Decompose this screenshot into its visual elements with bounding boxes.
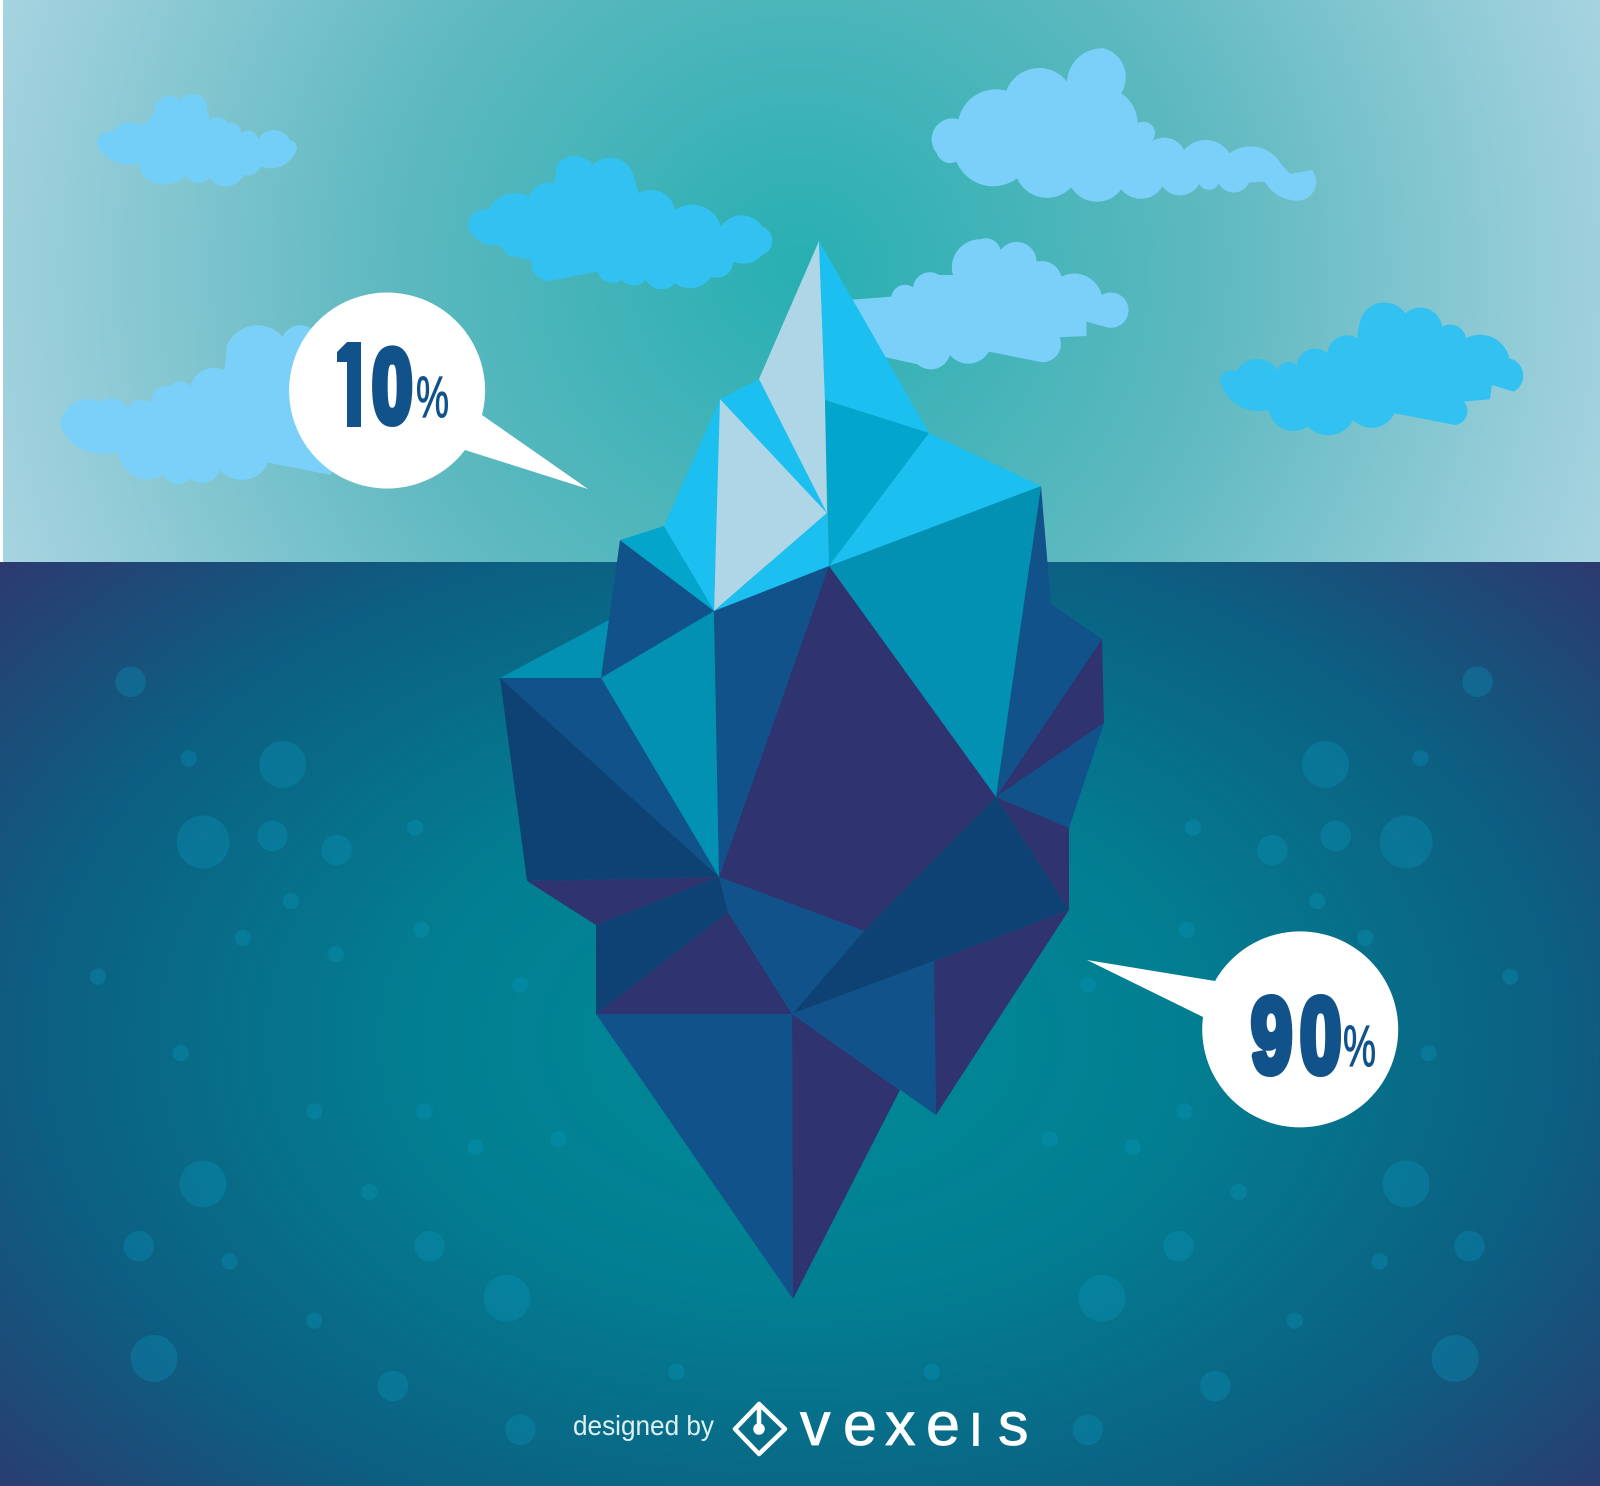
cloud: large top right bbox=[932, 48, 1316, 202]
wordmark: e bbox=[843, 1390, 877, 1458]
percent sign: % bbox=[1343, 1015, 1376, 1079]
callout bubble and tail bbox=[1087, 931, 1398, 1127]
cloud: bright right bbox=[1220, 302, 1523, 435]
percent sign: % bbox=[416, 366, 449, 430]
water background bbox=[0, 562, 1600, 1486]
value: 90: 9 bbox=[1251, 977, 1292, 1095]
value: 90 bbox=[1251, 977, 1341, 1095]
value: 10: 0 bbox=[372, 329, 412, 445]
callout: 10% bbox=[289, 293, 588, 489]
cloud: small top left bbox=[97, 94, 297, 186]
cloud: behind iceberg bbox=[848, 238, 1129, 369]
credit text: designed by bbox=[573, 1410, 714, 1441]
value: 10: 1 bbox=[332, 323, 376, 448]
wordmark: x bbox=[885, 1390, 916, 1458]
credit: designed by vexels bbox=[573, 1390, 1028, 1458]
cloud: left behind callout bbox=[60, 325, 350, 484]
cloud: bright middle bbox=[468, 156, 772, 289]
callout: 90% bbox=[1087, 931, 1398, 1127]
wordmark: e bbox=[926, 1390, 960, 1458]
iceberg: exposed tip facets bbox=[620, 241, 1041, 611]
bubbles in the water bbox=[90, 666, 1518, 1445]
icon: vexels diamond bbox=[735, 1404, 785, 1454]
iceberg bbox=[500, 241, 1104, 1299]
value: 10 bbox=[337, 342, 412, 427]
wordmark: v bbox=[800, 1390, 831, 1458]
wordmark: l bbox=[971, 1406, 981, 1455]
callout bubble and tail bbox=[289, 293, 588, 489]
wordmark: s bbox=[998, 1390, 1028, 1458]
value: 90: 0 bbox=[1300, 977, 1341, 1095]
iceberg: submerged facets bbox=[500, 486, 1104, 1299]
sky background bbox=[3, 0, 1600, 562]
